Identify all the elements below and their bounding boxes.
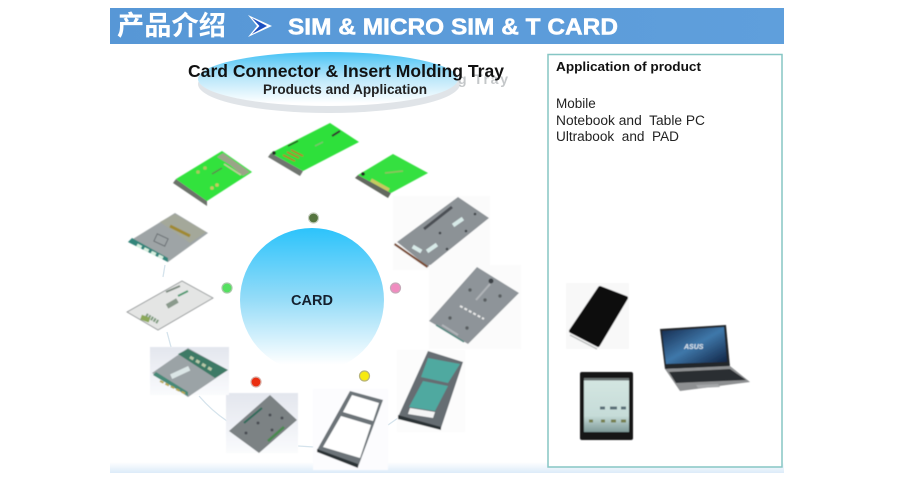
- connector: green top centre: [268, 123, 359, 176]
- ghost title text: g Tray: [458, 71, 508, 87]
- laptop screen logo: ASUS: [683, 344, 704, 351]
- connector: grey with backdrop bottom: [226, 393, 298, 453]
- footer gradient band: [110, 462, 784, 473]
- icon: laptop: [660, 325, 750, 391]
- header Chinese title: 产品介绍: [117, 11, 226, 41]
- subtitle text: Products and Application: [263, 82, 427, 97]
- central disc: CARD: [240, 228, 384, 372]
- panel: application of product: [548, 54, 782, 467]
- indicator dot: yellow: [360, 371, 370, 381]
- connector: silver left: [127, 281, 213, 330]
- icon: tablet: [580, 372, 633, 440]
- connector: grey top left: [128, 213, 208, 262]
- indicator dot: pink: [390, 283, 400, 293]
- title text: Card Connector & Insert Molding Tray: [188, 61, 504, 81]
- header bar: [110, 8, 784, 44]
- indicator dot: green: [222, 283, 232, 293]
- title oval badge: [188, 52, 508, 113]
- connector: green top right: [355, 154, 428, 198]
- indicator dot: red: [251, 377, 261, 387]
- icon: smartphone: [566, 283, 629, 349]
- tray: teal right: [397, 350, 465, 432]
- icon: chevron inner: [252, 18, 267, 34]
- tray: white bottom centre: [313, 389, 388, 470]
- connecting ring segments: [163, 265, 398, 447]
- application list: Mobile: [556, 96, 596, 111]
- application list: [556, 96, 705, 144]
- connector: grey metal right: [429, 265, 521, 349]
- indicator dot: dark green: [308, 213, 318, 223]
- icon: double chevron: [248, 15, 272, 37]
- connector: grey metal top right: [393, 196, 490, 270]
- application list: Notebook and Table PC: [556, 113, 705, 128]
- connector: green top left: [173, 151, 252, 206]
- disc label: CARD: [291, 293, 333, 309]
- header product title: SIM & MICRO SIM & T CARD: [288, 14, 618, 40]
- connector: grey with backdrop left: [150, 347, 229, 397]
- application list: Ultrabook and PAD: [556, 129, 679, 144]
- panel heading: Application of product: [556, 59, 702, 74]
